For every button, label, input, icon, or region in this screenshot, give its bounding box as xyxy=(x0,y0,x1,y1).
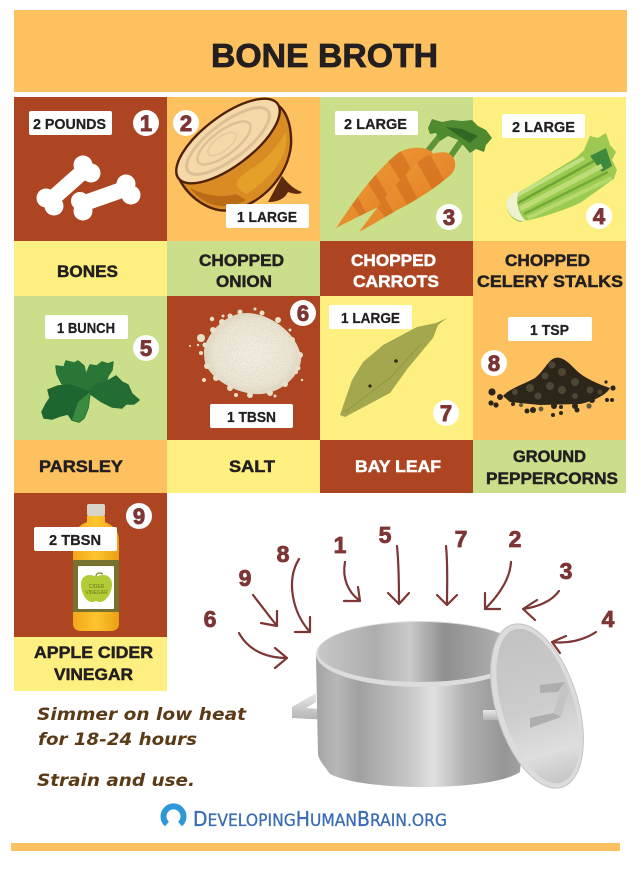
icon: vinegar bottle xyxy=(73,504,119,631)
quantity: 2 tbsn: 2 TBSN xyxy=(49,532,101,549)
label: chopped onion: ONION xyxy=(216,272,272,291)
quantity: 2 pounds: 2 POUNDS xyxy=(33,116,106,133)
label: ground peppercorns xyxy=(486,447,618,488)
badge 8: 8 xyxy=(488,351,500,376)
label: bones: BONES xyxy=(57,262,118,281)
quantity: 1 tsp xyxy=(508,317,592,341)
illustration: cooking pot with lid xyxy=(292,613,601,799)
icon: parsley xyxy=(42,361,139,422)
quantity: 1 tbsn: 1 TBSN xyxy=(227,409,276,426)
label: chopped celery stalks: CELERY STALKS xyxy=(477,272,623,291)
badge 2 xyxy=(173,110,199,136)
instructions text: for 18-24 hours xyxy=(38,730,197,750)
arrow 6 xyxy=(204,606,287,668)
badge 2: 2 xyxy=(180,111,192,136)
pot handle right xyxy=(483,710,499,720)
quantity: 1 large xyxy=(329,305,412,329)
panel: apple cider vinegar xyxy=(14,493,167,691)
panel: bones xyxy=(14,97,167,296)
bottom bar xyxy=(11,843,620,851)
label: ground peppercorns: GROUND xyxy=(513,447,586,466)
label: chopped carrots xyxy=(351,251,439,291)
panel: salt xyxy=(167,296,320,493)
label: chopped celery stalks: CHOPPED xyxy=(505,251,590,270)
label: bay leaf: BAY LEAF xyxy=(355,457,441,476)
logo icon xyxy=(164,806,183,824)
quantity: 1 bunch xyxy=(45,315,128,339)
quantity: 1 tbsn xyxy=(210,404,293,428)
numbered arrows into pot xyxy=(204,522,615,668)
pot handle left xyxy=(292,693,330,720)
badge 1 xyxy=(133,110,159,136)
badge 5: 5 xyxy=(140,336,152,361)
panel: carrots xyxy=(320,97,492,296)
panel: celery xyxy=(473,97,626,296)
quantity: 2 large xyxy=(335,111,418,135)
badge 7: 7 xyxy=(440,401,452,426)
icon: bay leaf xyxy=(340,318,447,417)
badge 3: 3 xyxy=(443,205,455,230)
badge 6: 6 xyxy=(297,301,309,326)
quantity: 2 large: 2 LARGE xyxy=(512,119,575,136)
badge 1: 1 xyxy=(140,111,152,136)
arrow 5 xyxy=(379,522,409,604)
badge 9 xyxy=(126,503,152,529)
arrow 6: 6 xyxy=(204,606,216,632)
arrow 5: 5 xyxy=(379,522,392,548)
panel: parsley xyxy=(14,296,167,493)
label: chopped onion xyxy=(199,251,284,291)
quantity: 2 pounds xyxy=(29,111,112,135)
icon: celery xyxy=(506,133,617,222)
instructions text: Simmer on low heat xyxy=(37,705,247,725)
instructions text: Strain and use. xyxy=(37,771,195,791)
badge 5 xyxy=(133,335,159,361)
title: BONE BROTH xyxy=(211,37,438,74)
pot body xyxy=(316,655,530,787)
arrow 9 xyxy=(239,565,277,626)
quantity: 2 large: 2 LARGE xyxy=(344,116,407,133)
label: apple cider vinegar: VINEGAR xyxy=(54,665,133,684)
panel: bay leaf xyxy=(320,296,473,493)
logo: DevelopingHumanBrain.org xyxy=(164,806,447,831)
panel: peppercorns xyxy=(473,296,626,493)
arrow 1: 1 xyxy=(334,532,347,558)
icon: bones xyxy=(36,156,140,220)
lid xyxy=(473,613,601,799)
arrow 2 xyxy=(485,526,521,609)
arrow 8 xyxy=(277,541,310,632)
arrow 7: 7 xyxy=(455,526,467,552)
arrow 4 xyxy=(552,606,615,653)
arrow 1 xyxy=(334,532,360,601)
badge 8 xyxy=(481,350,507,376)
icon: onion xyxy=(163,84,302,211)
arrow 4: 4 xyxy=(602,606,615,632)
title banner xyxy=(14,10,627,92)
icon: vinegar bottle: VINEGAR xyxy=(85,590,108,596)
quantity: 2 tbsn xyxy=(34,527,117,551)
badge 9: 9 xyxy=(133,504,145,529)
label: apple cider vinegar: APPLE CIDER xyxy=(34,643,153,662)
badge 4: 4 xyxy=(593,204,606,229)
logo text: DEVELOPINGHUMANBRAIN.ORG xyxy=(193,807,447,831)
label: chopped carrots: CARROTS xyxy=(353,272,439,291)
label: apple cider vinegar xyxy=(34,643,153,684)
label: chopped celery stalks xyxy=(477,251,623,291)
badge 4 xyxy=(586,203,612,229)
panel: onion xyxy=(163,84,320,296)
arrow 3: 3 xyxy=(560,558,572,584)
icon: vinegar bottle: CIDER xyxy=(89,584,105,590)
quantity: 1 bunch: 1 BUNCH xyxy=(57,320,115,337)
icon: salt pile xyxy=(189,308,303,398)
icon: carrots xyxy=(336,119,492,232)
label: ground peppercorns: PEPPERCORNS xyxy=(486,469,618,488)
quantity: 1 large xyxy=(226,204,309,228)
label: chopped carrots: CHOPPED xyxy=(351,251,436,270)
badge 6 xyxy=(290,300,316,326)
label: salt: SALT xyxy=(229,457,276,476)
label: parsley: PARSLEY xyxy=(39,457,124,476)
quantity: 2 large xyxy=(502,114,585,138)
arrow 9: 9 xyxy=(239,565,251,591)
pot rim and interior xyxy=(316,621,524,687)
quantity: 1 large: 1 LARGE xyxy=(237,209,297,226)
instructions text xyxy=(37,705,247,791)
label: chopped onion: CHOPPED xyxy=(199,251,284,270)
quantity: 1 tsp: 1 TSP xyxy=(530,322,569,339)
arrow 2: 2 xyxy=(509,526,521,552)
quantity: 1 large: 1 LARGE xyxy=(341,310,400,327)
badge 7 xyxy=(433,400,459,426)
icon: peppercorns xyxy=(488,358,616,417)
arrow 3 xyxy=(523,558,572,620)
badge 3 xyxy=(436,204,462,230)
arrow 8: 8 xyxy=(277,541,290,567)
arrow 7 xyxy=(437,526,467,605)
